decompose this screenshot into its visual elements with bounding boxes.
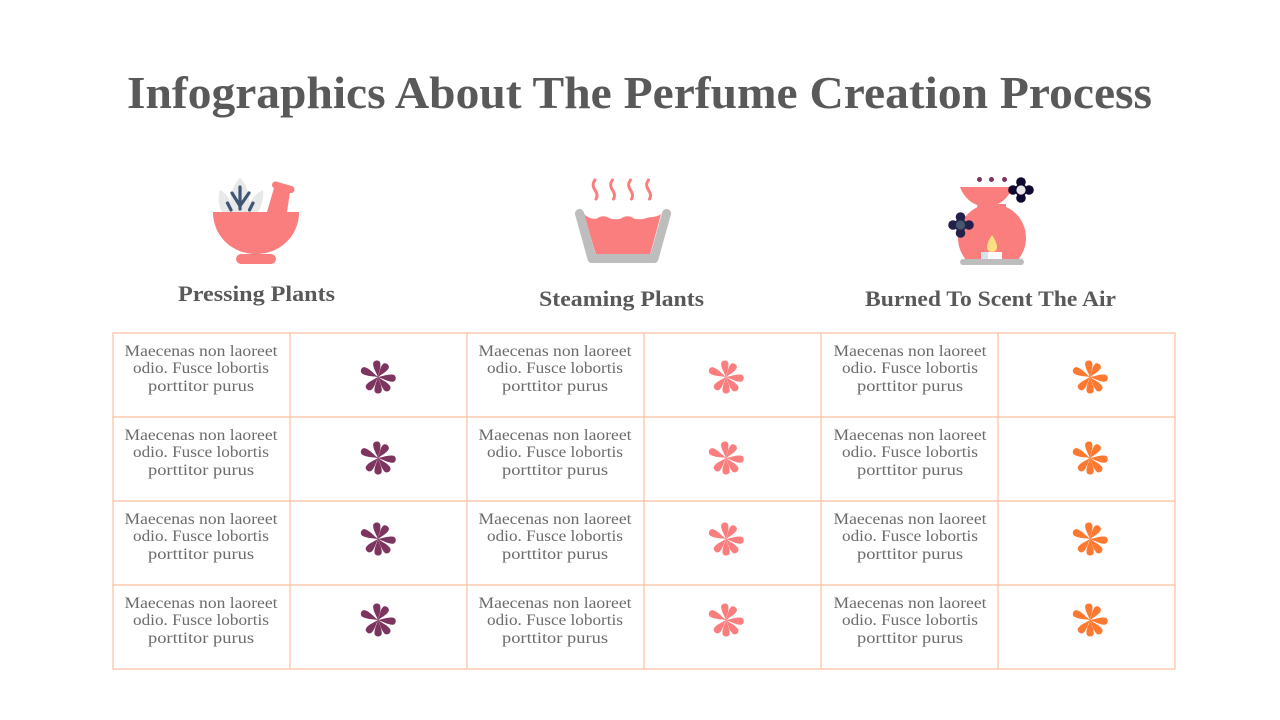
flowers column 1	[360, 360, 396, 636]
text column 1: porttitor purus	[148, 630, 254, 647]
text column 2: odio. Fusce lobortis	[487, 612, 623, 629]
text column 1: porttitor purus	[148, 546, 254, 563]
text column 2: porttitor purus	[502, 630, 608, 647]
text column 1: odio. Fusce lobortis	[133, 444, 269, 461]
text column 3: porttitor purus	[857, 462, 963, 479]
title: Infographics About The Perfume Creation Process	[127, 67, 1152, 118]
text column 3: Maecenas non laoreet	[834, 427, 987, 444]
text column 1	[124, 343, 278, 647]
text column 3: odio. Fusce lobortis	[842, 528, 978, 545]
heading: Burned To Scent The Air: Burned To Scent The Air	[865, 286, 1116, 311]
text column 3: odio. Fusce lobortis	[842, 444, 978, 461]
heading: Pressing Plants: Pressing Plants	[178, 281, 335, 306]
text column 2: Maecenas non laoreet	[478, 511, 632, 528]
text column 3: porttitor purus	[857, 378, 963, 395]
text column 2: porttitor purus	[502, 462, 608, 479]
flowers column 2	[708, 360, 744, 636]
heading: Steaming Plants: Steaming Plants	[539, 286, 704, 311]
text column 1: odio. Fusce lobortis	[133, 612, 269, 629]
text column 3: porttitor purus	[857, 546, 963, 563]
text column 3: Maecenas non laoreet	[834, 343, 987, 360]
icon: steaming basin	[580, 180, 666, 258]
text column 2	[478, 343, 632, 647]
text column 2: odio. Fusce lobortis	[487, 360, 623, 377]
text column 3: Maecenas non laoreet	[834, 511, 987, 528]
text column 1: Maecenas non laoreet	[124, 595, 278, 612]
icon: dark flower top	[1008, 177, 1034, 203]
text column 3: odio. Fusce lobortis	[842, 612, 978, 629]
icon: oil burner	[948, 177, 1034, 265]
text column 1: Maecenas non laoreet	[124, 343, 278, 360]
text column 2: Maecenas non laoreet	[478, 427, 632, 444]
text column 1: porttitor purus	[148, 462, 254, 479]
text column 2: Maecenas non laoreet	[478, 595, 632, 612]
table grid	[113, 333, 1175, 669]
flowers column 3	[1072, 360, 1108, 636]
text column 3: odio. Fusce lobortis	[842, 360, 978, 377]
text column 3: porttitor purus	[857, 630, 963, 647]
icon: mortar and pestle	[213, 178, 299, 264]
text column 2: odio. Fusce lobortis	[487, 444, 623, 461]
text column 3	[834, 343, 987, 647]
icon: dark flower left	[948, 212, 974, 238]
text column 1: porttitor purus	[148, 378, 254, 395]
text column 1: odio. Fusce lobortis	[133, 360, 269, 377]
text column 2: odio. Fusce lobortis	[487, 528, 623, 545]
text column 2: porttitor purus	[502, 546, 608, 563]
text column 2: porttitor purus	[502, 378, 608, 395]
text column 1: odio. Fusce lobortis	[133, 528, 269, 545]
text column 2: Maecenas non laoreet	[478, 343, 632, 360]
text column 3: Maecenas non laoreet	[834, 595, 987, 612]
text column 1: Maecenas non laoreet	[124, 427, 278, 444]
text column 1: Maecenas non laoreet	[124, 511, 278, 528]
